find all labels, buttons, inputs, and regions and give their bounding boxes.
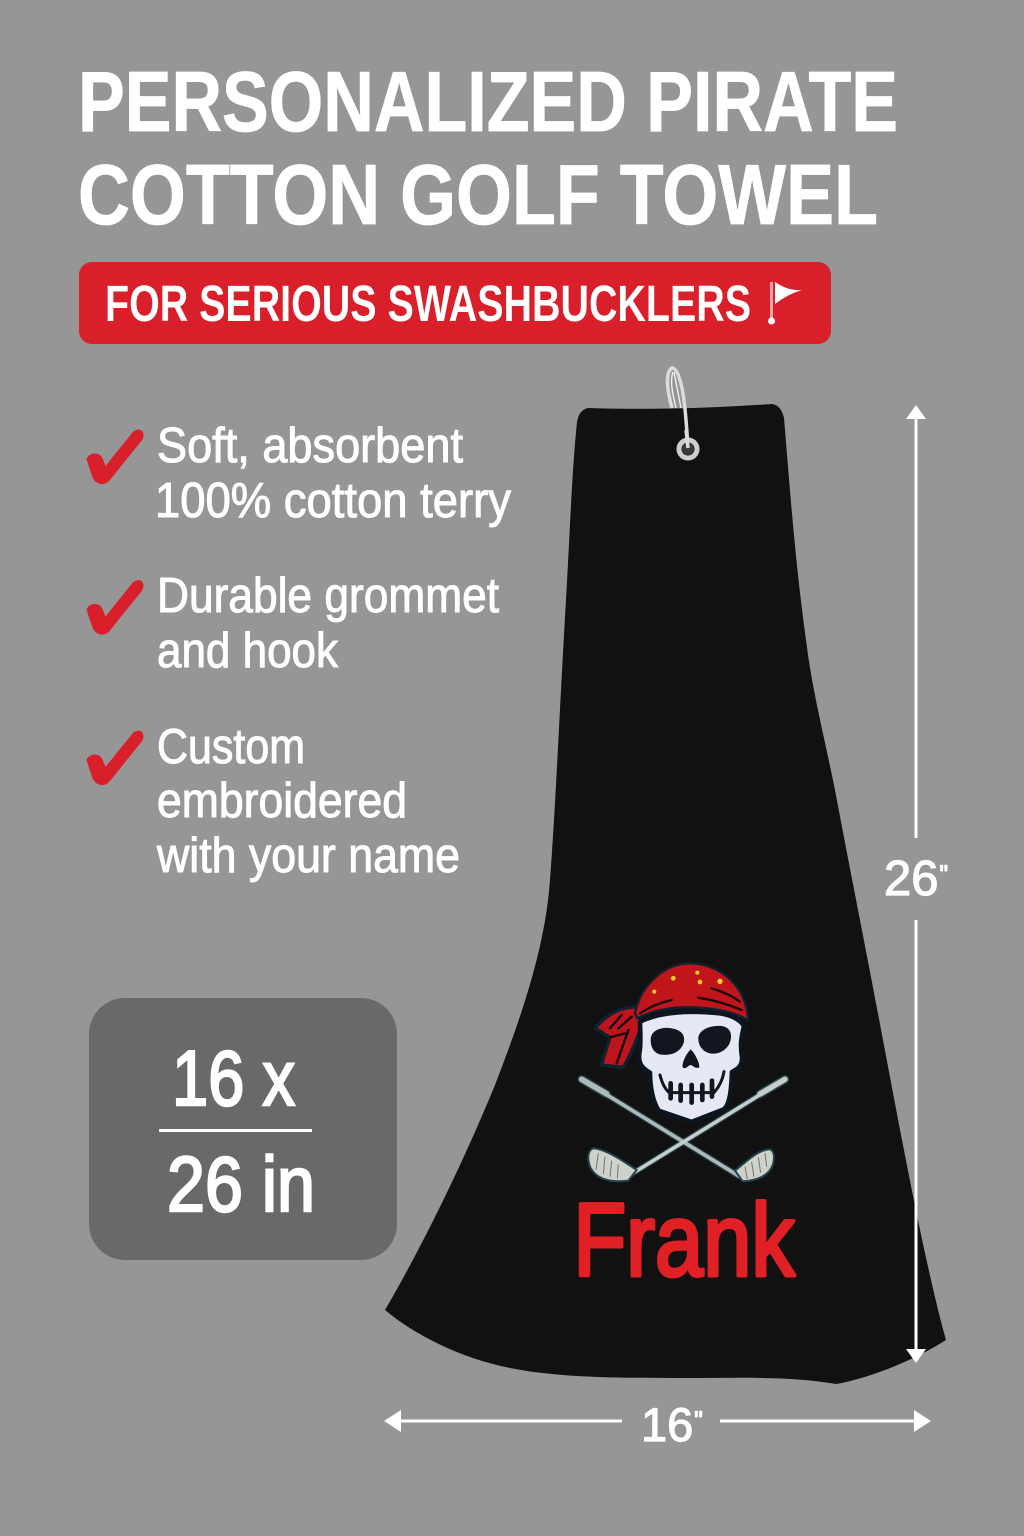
width dimension: 16 inches: 16 — [641, 1398, 693, 1451]
towel — [385, 404, 946, 1384]
feature list — [88, 419, 511, 883]
feature: soft absorbent — [88, 419, 511, 528]
height dimension: 26 inches: " — [940, 861, 948, 888]
feature: custom embroidered: embroidered — [157, 774, 407, 828]
feature: durable grommet — [88, 569, 499, 678]
name: Frank: Frank — [573, 1182, 795, 1297]
title — [78, 55, 898, 243]
size badge: 16 x — [172, 1034, 295, 1122]
title: COTTON GOLF TOWEL — [78, 148, 878, 243]
bandana — [635, 963, 748, 1021]
embroidery: pirate skull and clubs — [573, 963, 795, 1297]
feature: custom embroidered: with your name — [156, 829, 460, 883]
icon: hook and grommet — [667, 368, 697, 458]
feature: custom embroidered: Custom — [157, 720, 305, 774]
height dimension: 26 inches: 26 — [884, 852, 939, 906]
teeth — [660, 1072, 724, 1103]
feature: soft absorbent: 100% cotton terry — [155, 474, 511, 528]
banner: for serious swashbucklers — [79, 262, 831, 344]
eyes and nose — [651, 1026, 731, 1068]
width dimension: 16 inches — [384, 1398, 931, 1451]
feature: soft absorbent: Soft, absorbent — [157, 419, 463, 473]
golf club shafts — [582, 1079, 785, 1177]
bandana knot — [595, 1007, 642, 1067]
width dimension: 16 inches: " — [694, 1407, 703, 1434]
size badge: 26 in — [167, 1140, 315, 1228]
feature: durable grommet: and hook — [157, 624, 338, 678]
feature: durable grommet: Durable grommet — [157, 569, 499, 623]
banner: for serious swashbucklers: FOR SERIOUS SWASHBUCKLERS — [105, 275, 751, 332]
feature: custom embroidered — [88, 720, 460, 883]
size badge — [89, 998, 397, 1260]
icon: golf flag — [768, 282, 802, 324]
golf club heads — [588, 1148, 774, 1181]
skull — [639, 1012, 744, 1122]
height dimension: 26 inches — [884, 405, 948, 1363]
